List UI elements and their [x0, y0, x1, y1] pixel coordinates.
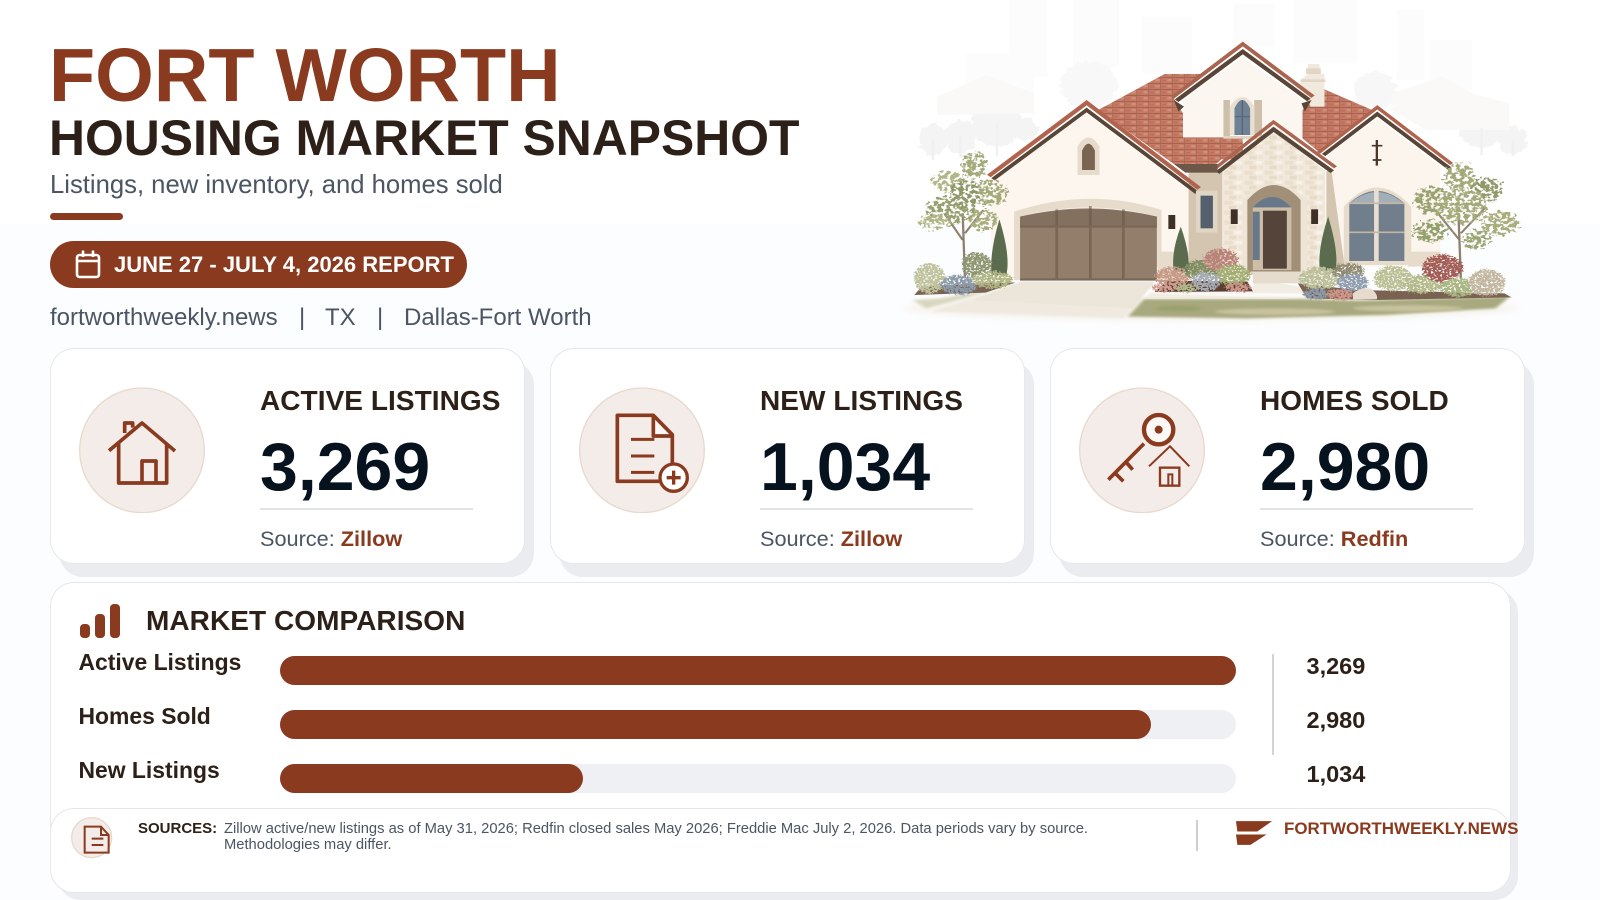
lights: [1168, 209, 1318, 229]
chimney: [1301, 64, 1324, 107]
icon: key and house: [1079, 387, 1205, 513]
bar: active listings: [280, 656, 1236, 685]
stone bands: [1158, 252, 1440, 278]
label: ACTIVE LISTINGS: [260, 385, 500, 416]
meta line: TX: [325, 304, 356, 331]
source: Source: Zillow: [260, 526, 402, 551]
subtitle heading: HOUSING MARKET SNAPSHOT: [49, 110, 799, 166]
iron anchor: [1372, 140, 1382, 166]
ground soft: [903, 296, 1518, 321]
sources text: Zillow active/new listings as of May 31, 2026; Redfin closed sales May 2026; Freddie Mac July 2, 2026. Data periods vary by source.: [224, 821, 1088, 837]
meta line: |: [377, 304, 383, 331]
side window: [1196, 191, 1218, 233]
meta line: [50, 304, 592, 331]
source: Source: Zillow: [760, 526, 902, 551]
icon: house: [79, 387, 205, 513]
shrubs: [914, 249, 1505, 300]
panel: homes sold: [1050, 348, 1525, 564]
right gable roof: [1319, 107, 1452, 164]
date pill: [50, 241, 467, 288]
panel: new listings: [550, 348, 1025, 564]
vent: [1077, 138, 1099, 175]
row label: homes sold: Homes Sold: [78, 703, 211, 729]
icon: document plus: [579, 387, 705, 513]
sources label: SOURCES:: [138, 820, 217, 837]
bar: new listings: [280, 764, 1236, 793]
cypress: [991, 217, 1336, 275]
accent bar: [50, 213, 123, 220]
row value: homes sold: 2,980: [1306, 707, 1365, 733]
tagline: Listings, new inventory, and homes sold: [50, 170, 503, 198]
trees: [944, 207, 1486, 279]
value: 1,034: [760, 429, 930, 505]
right wall: [1329, 118, 1440, 267]
icon: calendar: [76, 250, 100, 278]
left wall: [990, 113, 1189, 281]
row value: new listings: 1,034: [1306, 761, 1365, 787]
sources text: [224, 821, 1088, 853]
garage: [1014, 199, 1161, 280]
logo mark: [1236, 821, 1272, 845]
date text: JUNE 27 - JULY 4, 2026 REPORT: [114, 252, 454, 277]
panel: sources footer: [50, 808, 1511, 893]
sources text: Methodologies may differ.: [224, 837, 392, 853]
value: 3,269: [260, 429, 430, 505]
big window: [1344, 188, 1411, 265]
bar: homes sold: [280, 710, 1236, 739]
stone gable: [1222, 132, 1325, 275]
meta line: fortworthweekly.news: [50, 304, 278, 331]
logo text: FORTWORTHWEEKLY.NEWS: [1284, 819, 1518, 838]
icon: source document: [71, 817, 112, 858]
panel: active listings: [50, 348, 525, 564]
entry arch: [1243, 183, 1307, 275]
row value: active listings: 3,269: [1306, 653, 1365, 679]
meta line: Dallas-Fort Worth: [404, 304, 592, 331]
roof band under dormer: [1183, 139, 1243, 159]
panel: market comparison: [50, 582, 1511, 893]
label: HOMES SOLD: [1260, 385, 1449, 416]
left gable roof: [989, 103, 1199, 188]
back roofs: [1098, 74, 1243, 165]
row label: new listings: New Listings: [78, 757, 220, 783]
heading: MARKET COMPARISON: [146, 605, 465, 636]
title: FORT WORTH: [49, 33, 561, 117]
label: NEW LISTINGS: [760, 385, 963, 416]
source: Source: Redfin: [1260, 526, 1408, 551]
mulch: [1155, 281, 1253, 292]
icon: bar chart: [80, 604, 120, 638]
row label: active listings: Active Listings: [78, 649, 241, 675]
meta line: |: [299, 304, 305, 331]
dormer: [1183, 57, 1302, 137]
value: 2,980: [1260, 429, 1430, 505]
house illustration: [908, 42, 1528, 322]
